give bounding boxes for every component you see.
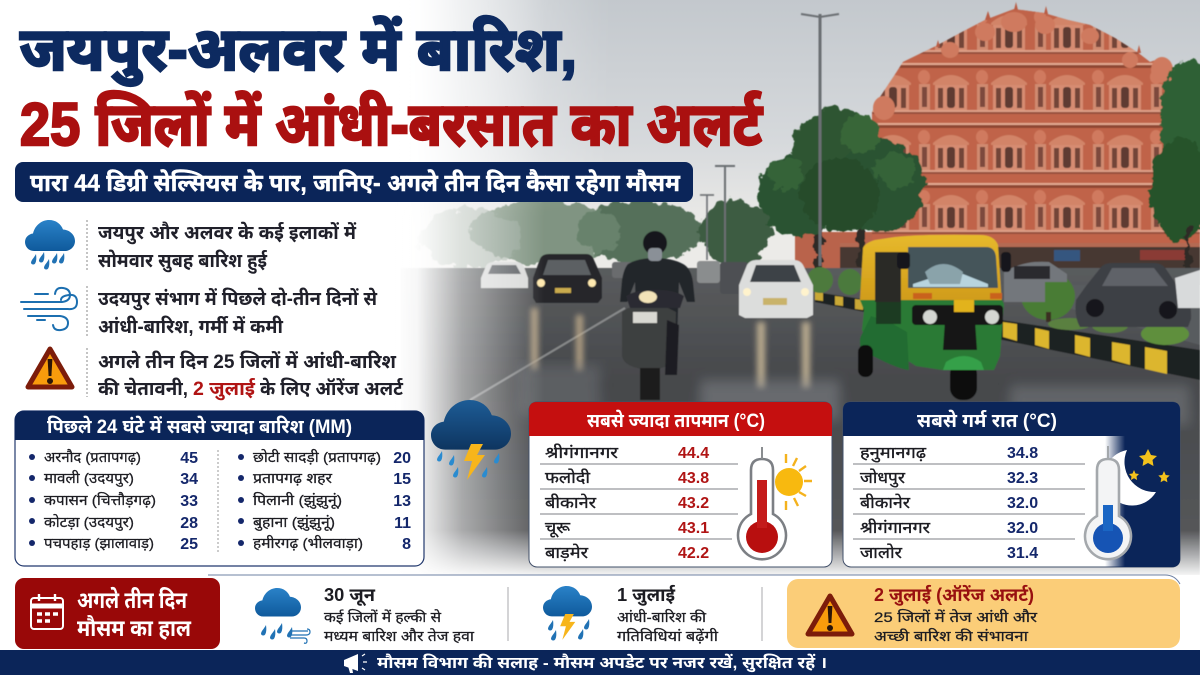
icon: sun <box>775 454 812 510</box>
key point: rain in Jaipur and Alwar: सोमवार सुबह बारिश हुई <box>98 249 268 274</box>
panel: hottest night: बीकानेर <box>860 493 911 512</box>
icon: thermometer red <box>738 447 786 559</box>
panel: rainfall last 24 hours: अरनौद (प्रतापगढ़) <box>44 449 141 465</box>
panel: rainfall last 24 hours: कपासन (चित्तौड़गढ़) <box>44 492 156 508</box>
street lamps <box>700 14 839 266</box>
road <box>400 268 1200 600</box>
key point: warning for 25 districts: अगले तीन दिन 25 जिलों में आंधी-बारिश <box>98 350 397 373</box>
panel: hottest night: 32.0 <box>1007 495 1038 512</box>
rider on scooter <box>620 231 695 400</box>
road reflections <box>531 308 810 388</box>
panel: hottest night: 32.0 <box>1007 520 1038 537</box>
forecast: 30 June: मध्यम बारिश और तेज हवा <box>324 627 474 644</box>
forecast strip <box>15 575 1181 650</box>
panel: rainfall last 24 hours: 15 <box>393 471 411 488</box>
trees <box>420 60 1200 273</box>
forecast: 1 July: आंधी-बारिश की <box>617 609 706 625</box>
subtitle bar <box>15 162 693 202</box>
panel: rainfall last 24 hours: प्रतापगढ़ शहर <box>253 470 332 486</box>
fades to white <box>390 0 610 190</box>
key point: rain in Jaipur and Alwar <box>25 220 357 274</box>
panel: rainfall last 24 hours: पचपहाड़ (झालावाड़) <box>44 535 154 551</box>
median with stripes <box>807 267 1200 380</box>
forecast: 2 July orange alert <box>787 579 1180 648</box>
icon: megaphone <box>344 654 367 673</box>
panel: rainfall last 24 hours: हमीरगढ़ (भीलवाड़ा) <box>253 535 363 551</box>
auto rickshaw <box>858 235 1011 400</box>
forecast: next three days label: अगले तीन दिन <box>77 587 188 613</box>
title <box>20 16 764 158</box>
icon: rain cloud <box>25 220 75 269</box>
forecast: 30 June: कई जिलों में हल्की से <box>324 608 442 625</box>
panel: rainfall last 24 hours: 34 <box>180 471 198 488</box>
panel: hottest night: जोधपुर <box>860 469 905 488</box>
footer advisory bar <box>0 650 1200 675</box>
panel: hottest night: 34.8 <box>1007 445 1038 462</box>
panel: highest temperature: 43.1 <box>678 520 709 537</box>
panel: highest temperature: सबसे ज्यादा तापमान (°C) <box>587 409 765 432</box>
icon: calendar <box>31 594 63 629</box>
forecast: 2 July orange alert: 2 जुलाई (ऑरेंज अलर्ट) <box>874 584 1034 606</box>
panel: rainfall last 24 hours: पिछले 24 घंटे में सबसे ज्यादा बारिश (MM) <box>47 415 352 438</box>
panel: hottest night <box>843 402 1180 567</box>
panel: rainfall last 24 hours: 11 <box>394 515 411 532</box>
panel: highest temperature: 44.4 <box>678 445 709 462</box>
forecast: 1 July: 1 जुलाई <box>617 584 676 606</box>
icon: warning triangle small <box>808 596 852 634</box>
footer advisory bar: मौसम विभाग की सलाह - मौसम अपडेट पर नजर रखें, सुरक्षित रहें । <box>377 653 827 673</box>
panel: highest temperature: चूरू <box>545 520 571 538</box>
key point: warning for 25 districts <box>28 348 404 401</box>
key point: storm in Udaipur division: आंधी-बारिश, गर्मी में कमी <box>98 315 283 338</box>
panel: hottest night: जालोर <box>860 544 902 562</box>
panel: highest temperature: फलोदी <box>545 469 591 487</box>
key point: rain in Jaipur and Alwar: जयपुर और अलवर के कई इलाकों में <box>98 221 357 245</box>
panel: highest temperature: बाड़मेर <box>545 543 589 562</box>
panel: hottest night: 32.3 <box>1007 470 1038 487</box>
forecast: 30 June <box>255 585 474 644</box>
title: जयपुर-अलवर में बारिश, <box>20 16 577 87</box>
panel: rainfall last 24 hours: छोटी सादड़ी (प्रतापगढ़) <box>253 449 381 465</box>
forecast: 30 June: 30 जून <box>324 585 376 607</box>
panel: rainfall last 24 hours <box>15 411 424 566</box>
panel: rainfall last 24 hours: 45 <box>180 450 198 467</box>
forecast: 2 July orange alert: 25 जिलों में तेज आंधी और <box>874 608 1037 625</box>
panel: highest temperature: 43.8 <box>678 470 709 487</box>
panel: highest temperature: श्रीगंगानगर <box>545 444 619 462</box>
cars far right <box>1004 262 1200 327</box>
forecast: next three days label: मौसम का हाल <box>77 615 192 641</box>
icon: wind <box>21 288 77 330</box>
panel: hottest night: सबसे गर्म रात (°C) <box>917 409 1057 432</box>
key point: warning for 25 districts: 2 जुलाई <box>193 377 256 401</box>
icon: cloud with rain and wind <box>255 588 310 643</box>
forecast: next three days label <box>15 578 220 649</box>
key point: storm in Udaipur division: उदयपुर संभाग में पिछले दो-तीन दिनों से <box>98 287 378 311</box>
panel: rainfall last 24 hours: 8 <box>402 536 411 553</box>
key point: warning for 25 districts: की चेतावनी, <box>98 377 188 400</box>
panel: rainfall last 24 hours: मावली (उदयपुर) <box>44 470 134 488</box>
panel: rainfall last 24 hours: पिलानी (झुंझुनूं) <box>253 492 342 510</box>
icon: warning triangle <box>28 349 72 387</box>
panel: rainfall last 24 hours: 20 <box>393 450 411 467</box>
panel: rainfall last 24 hours: कोटड़ा (उदयपुर) <box>44 514 134 532</box>
icon: thermometer blue <box>1085 446 1131 559</box>
forecast: 1 July: गतिविधियां बढ़ेंगी <box>617 628 718 644</box>
icon: moon and stars <box>1104 449 1170 506</box>
icon: cloud with lightning <box>543 586 592 640</box>
panel: rainfall last 24 hours: 28 <box>180 515 198 532</box>
subtitle bar: पारा 44 डिग्री सेल्सियस के पार, जानिए- अगले तीन दिन कैसा रहेगा मौसम <box>30 169 680 197</box>
forecast: 1 July <box>543 584 718 644</box>
Hawa Mahal building <box>795 2 1200 270</box>
panel: highest temperature: 43.2 <box>678 495 709 512</box>
panel: hottest night: 31.4 <box>1007 545 1038 562</box>
key point: storm in Udaipur division <box>21 286 378 338</box>
key point: warning for 25 districts: के लिए ऑरेंज अलर्ट <box>260 377 404 400</box>
right side road <box>1000 285 1200 345</box>
panel: hottest night: श्रीगंगानगर <box>860 519 930 537</box>
title: 25 जिलों में आंधी-बरसात का अलर्ट <box>20 91 764 158</box>
panel: rainfall last 24 hours: 13 <box>393 493 411 510</box>
panel: highest temperature: बीकानेर <box>545 493 597 512</box>
icon: storm cloud with lightning <box>431 400 511 480</box>
panel: highest temperature <box>529 402 832 567</box>
panel: hottest night: हनुमानगढ़ <box>860 445 927 463</box>
panel: rainfall last 24 hours: बुहाना (झुंझुनूं) <box>253 514 335 532</box>
panel: rainfall last 24 hours: 25 <box>180 536 198 553</box>
panel: rainfall last 24 hours: 33 <box>180 493 198 510</box>
panel: highest temperature: 42.2 <box>678 545 709 562</box>
forecast: 2 July orange alert: अच्छी बारिश की संभावना <box>874 628 1028 644</box>
traffic cars <box>481 254 813 318</box>
